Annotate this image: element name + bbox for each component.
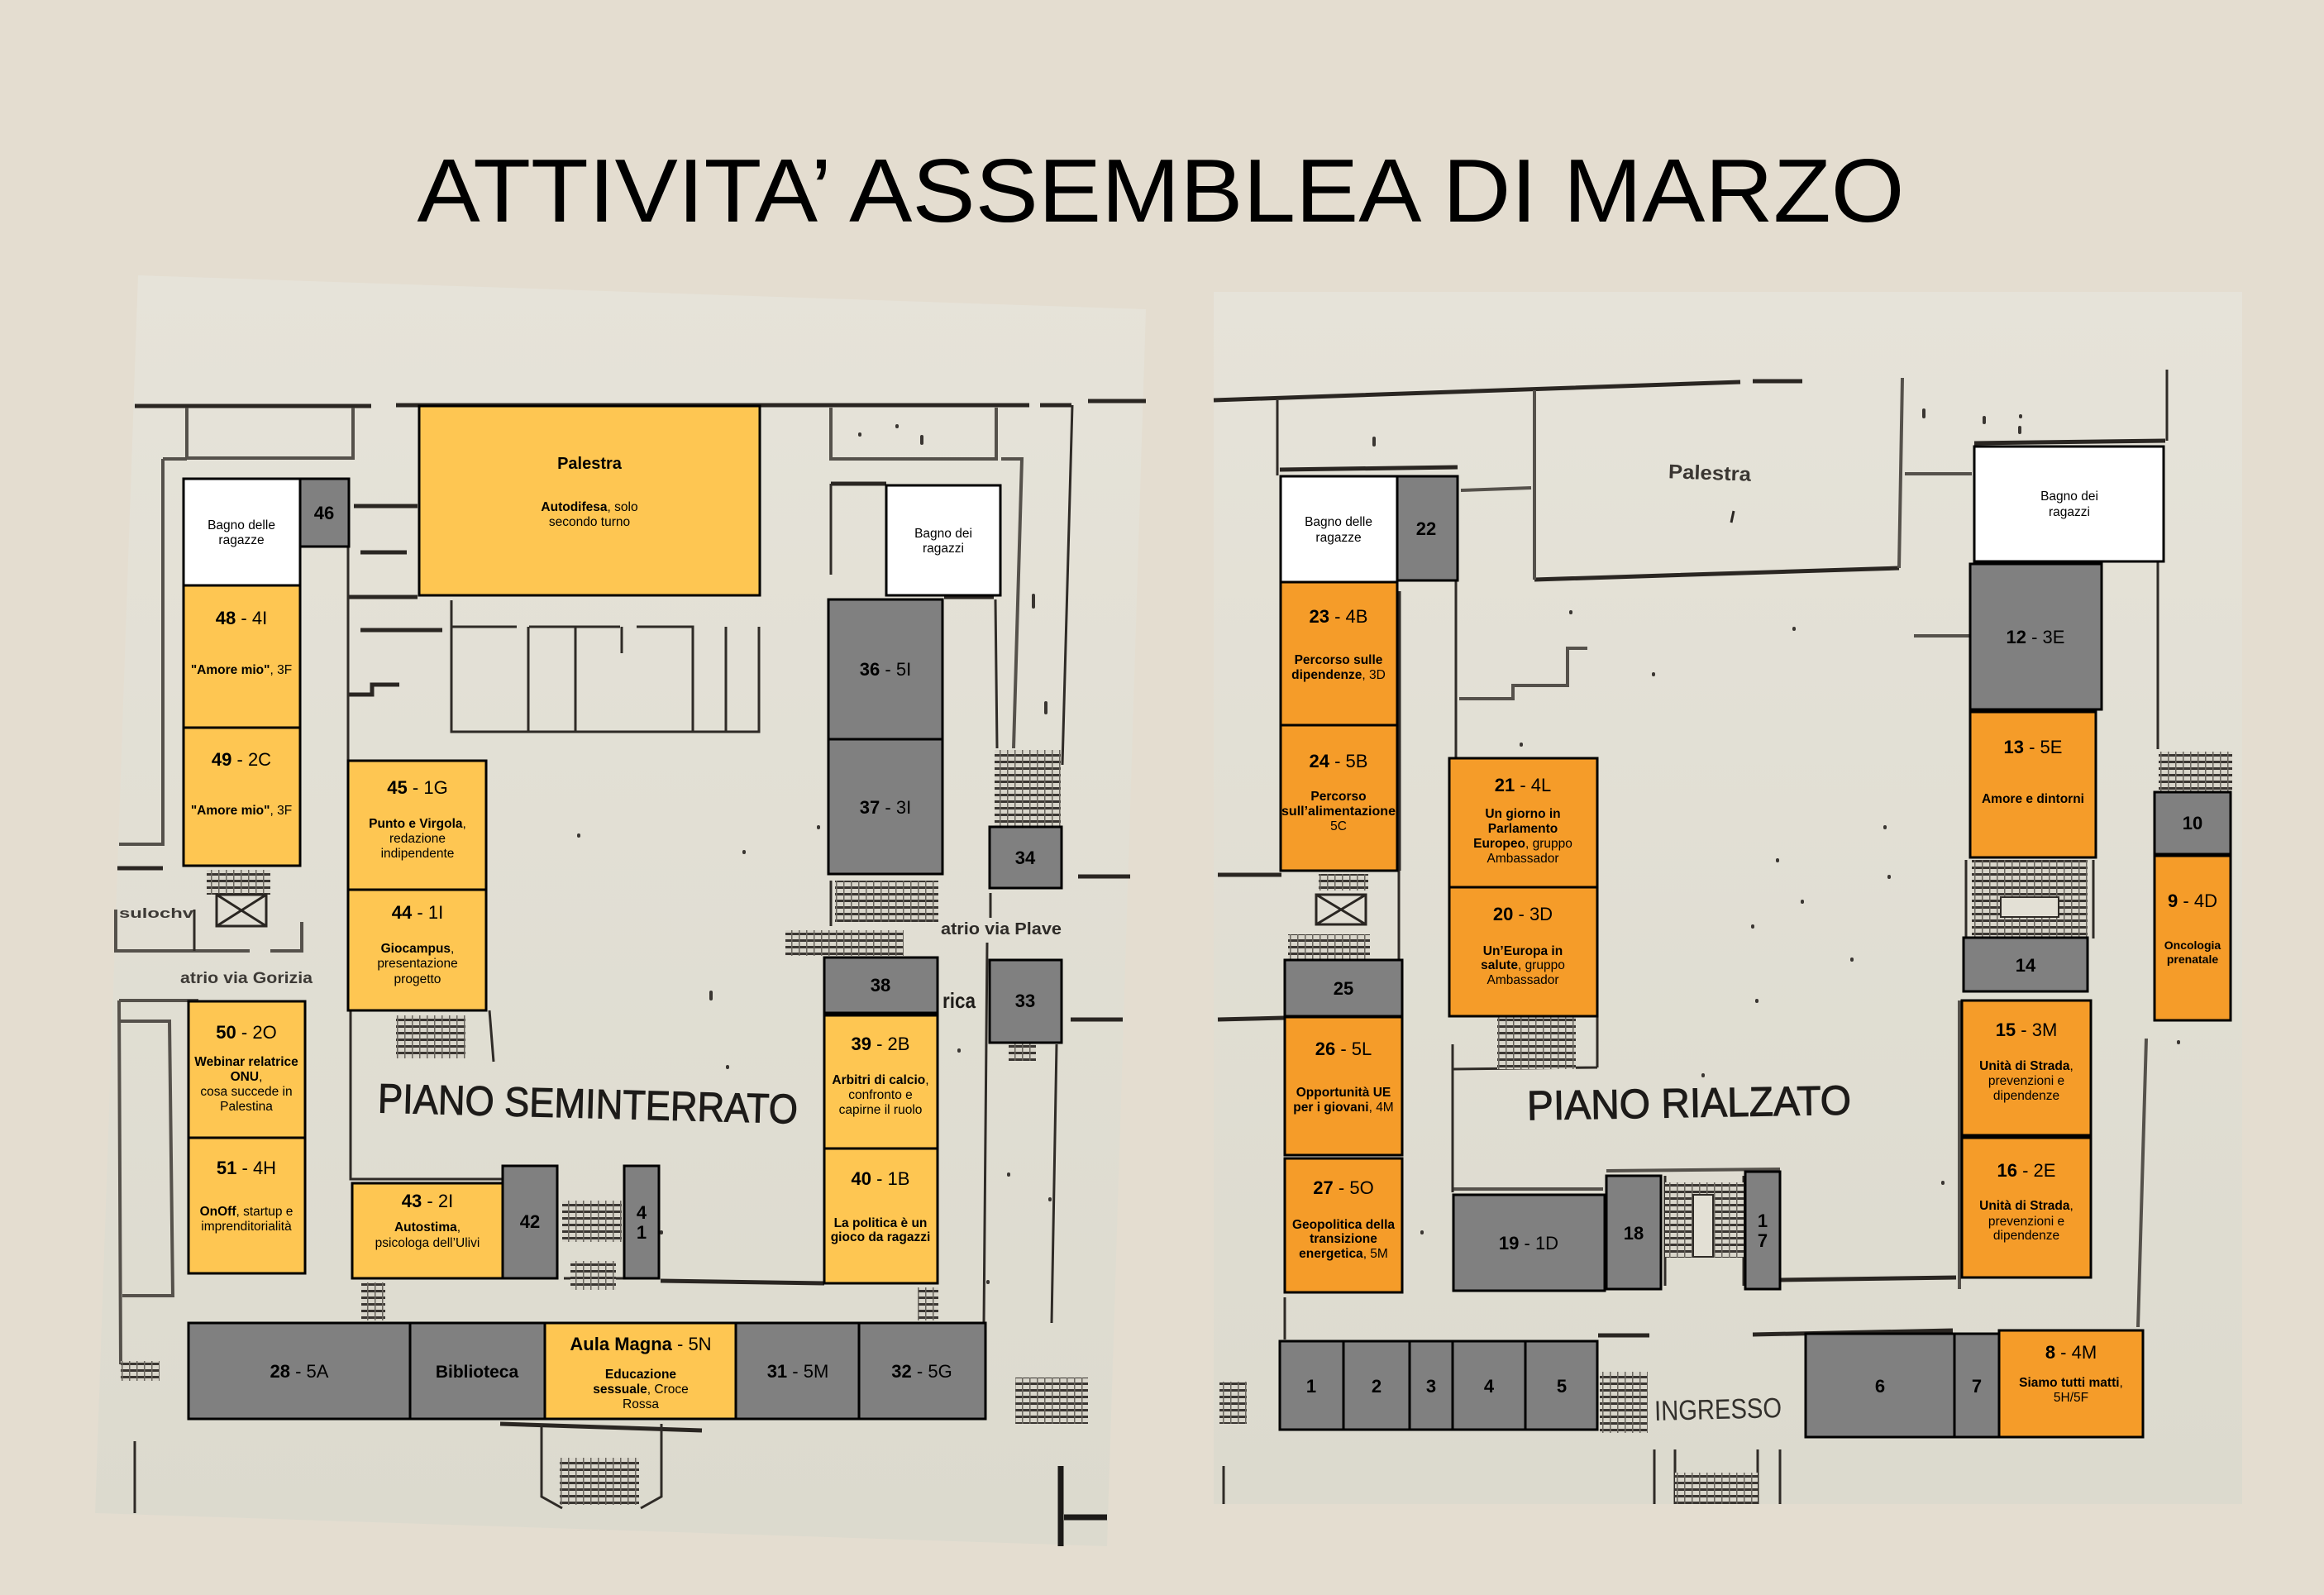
room 23: Percorso sulle — [1295, 653, 1383, 667]
room 45: indipendente — [381, 847, 454, 861]
room 3 — [1410, 1341, 1453, 1430]
room 18: 18 — [1624, 1223, 1644, 1244]
room 14 — [1964, 938, 2088, 991]
room 34: 34 — [1015, 848, 1036, 868]
room 50 — [188, 1001, 305, 1138]
room 10 — [2155, 792, 2231, 854]
panel: piano rialzato — [1214, 292, 2242, 1504]
room: bagno dei ragazzi: ragazzi — [923, 542, 964, 556]
paper floor plan background — [95, 275, 1146, 1546]
room 48: "Amore mio", 3F — [191, 663, 292, 677]
room 31: 31 - 5M — [767, 1361, 828, 1382]
room 24: 5C — [1330, 819, 1347, 833]
room 27: energetica, 5M — [1299, 1247, 1388, 1261]
room 51: 51 - 4H — [217, 1158, 276, 1178]
room 41 — [624, 1166, 659, 1278]
room 33 — [990, 960, 1062, 1043]
room 14: 14 — [2016, 955, 2036, 976]
room 21 — [1449, 758, 1597, 887]
room 41: 1 — [637, 1222, 647, 1243]
room 21: Parlamento — [1488, 822, 1558, 836]
room 13: Amore e dintorni — [1982, 792, 2084, 806]
plan labels: sulochv — [119, 905, 194, 921]
room 46: 46 — [314, 503, 334, 523]
room 20 — [1449, 887, 1597, 1016]
floor label: piano rialzato: PIANO RIALZATO — [1527, 1077, 1851, 1129]
room 7 — [1954, 1334, 1999, 1437]
room 8: Siamo tutti matti, — [2019, 1376, 2123, 1390]
room 50: Webinar relatrice — [194, 1055, 298, 1069]
room: bagno delle ragazze: Bagno delle — [1305, 515, 1372, 529]
room 8: 5H/5F — [2054, 1391, 2088, 1405]
room 10: 10 — [2183, 813, 2202, 833]
room: aula magna: sessuale, Croce — [593, 1382, 689, 1397]
room 22 — [1397, 476, 1458, 580]
room 20: Un’Europa in — [1483, 944, 1563, 958]
room 21: Europeo, gruppo — [1473, 837, 1572, 851]
room 50: Palestina — [220, 1100, 273, 1114]
room 16: 16 - 2E — [1997, 1160, 2055, 1181]
room 48: 48 - 4I — [216, 608, 267, 628]
plan labels: rica — [942, 988, 976, 1013]
room 16: prevenzioni e — [1988, 1215, 2064, 1229]
room 21: 21 - 4L — [1495, 775, 1551, 795]
room 43 — [352, 1183, 503, 1278]
room: bagno delle ragazze — [184, 479, 300, 585]
room 39: Arbitri di calcio, — [832, 1073, 929, 1087]
paper floor plan background — [1214, 292, 2242, 1504]
room 15: 15 - 3M — [1996, 1020, 2057, 1040]
room 51 — [188, 1138, 305, 1273]
room 36: 36 - 5I — [860, 659, 911, 680]
room 39: confronto e — [848, 1088, 913, 1102]
room: bagno delle ragazze — [1281, 476, 1397, 582]
plan labels: atrio via Gorizia — [180, 970, 313, 987]
room 12 — [1970, 564, 2102, 709]
room 17: 1 — [1758, 1211, 1768, 1231]
room 38 — [824, 957, 938, 1013]
room 24: 24 - 5B — [1310, 751, 1367, 771]
room 12: 12 - 3E — [2007, 627, 2064, 647]
room: palestra: Palestra — [557, 455, 623, 473]
room 23: 23 - 4B — [1310, 606, 1367, 627]
room: bagno dei ragazzi: Bagno dei — [914, 527, 972, 541]
room 7: 7 — [1972, 1376, 1982, 1397]
room 45: redazione — [389, 832, 446, 846]
room 1: 1 — [1306, 1376, 1316, 1397]
room 34 — [990, 827, 1062, 888]
room 43: 43 - 2I — [402, 1191, 453, 1211]
room 2: 2 — [1372, 1376, 1382, 1397]
room: aula magna — [545, 1323, 736, 1419]
room 21: Ambassador — [1487, 852, 1559, 866]
room 40: 40 - 1B — [852, 1168, 909, 1189]
room 45 — [348, 761, 486, 890]
room 33: 33 — [1015, 991, 1035, 1011]
panel: piano seminterrato — [95, 275, 1146, 1546]
room 51: OnOff, startup e — [200, 1205, 293, 1219]
room 39: capirne il ruolo — [839, 1103, 922, 1117]
room 49: 49 - 2C — [212, 749, 271, 770]
plan labels: atrio via Plave — [941, 920, 1062, 938]
room 37: 37 - 3I — [860, 797, 911, 818]
room 27: 27 - 5O — [1313, 1177, 1374, 1198]
room 27 — [1285, 1158, 1402, 1292]
room 6: 6 — [1875, 1376, 1885, 1397]
room 16: dipendenze — [1993, 1229, 2059, 1243]
room 27: transizione — [1310, 1232, 1377, 1246]
room 24: Percorso — [1310, 790, 1367, 804]
plan line work — [116, 401, 1146, 1546]
room 23 — [1281, 582, 1397, 725]
room 43: Autostima, — [394, 1220, 461, 1234]
room 25: 25 — [1334, 978, 1353, 999]
room 17: 7 — [1758, 1230, 1768, 1251]
room 49: "Amore mio", 3F — [191, 804, 292, 818]
room 51: imprenditorialità — [201, 1220, 292, 1234]
room 25 — [1285, 960, 1402, 1016]
room 19 — [1453, 1195, 1605, 1291]
room 31 — [736, 1323, 859, 1419]
room 15 — [1962, 1000, 2091, 1135]
room 41: 4 — [637, 1202, 647, 1223]
room 50: ONU, — [231, 1070, 262, 1084]
room 44 — [348, 890, 486, 1010]
room: bagno dei ragazzi — [1974, 447, 2164, 561]
room 20: 20 - 3D — [1493, 904, 1553, 924]
room 18 — [1606, 1176, 1661, 1289]
room 1 — [1280, 1341, 1343, 1430]
room 13 — [1970, 712, 2096, 857]
room 44: 44 - 1I — [392, 902, 443, 923]
room: bagno delle ragazze: Bagno delle — [208, 518, 275, 532]
room 22: 22 — [1416, 518, 1436, 539]
room 36 — [828, 599, 942, 739]
room 37 — [828, 739, 942, 874]
room 13: 13 - 5E — [2004, 737, 2062, 757]
room 20: salute, gruppo — [1481, 958, 1565, 972]
room 26 — [1285, 1017, 1402, 1155]
room 15: dipendenze — [1993, 1089, 2059, 1103]
room 26: Opportunità UE — [1296, 1086, 1391, 1100]
room 50: 50 - 2O — [216, 1022, 277, 1043]
room 4 — [1453, 1341, 1525, 1430]
room 21: Un giorno in — [1485, 807, 1561, 821]
room 17 — [1745, 1172, 1780, 1289]
room 23: dipendenze, 3D — [1291, 668, 1386, 682]
room 5 — [1525, 1341, 1597, 1430]
room 28 — [188, 1323, 410, 1419]
floor label: piano seminterrato: PIANO SEMINTERRATO — [377, 1075, 799, 1133]
room 49 — [184, 728, 300, 866]
room: bagno dei ragazzi: ragazzi — [2049, 505, 2090, 519]
room 42 — [503, 1166, 557, 1278]
room 8: 8 - 4M — [2045, 1342, 2097, 1363]
room 32 — [859, 1323, 985, 1419]
room 9: prenatale — [2167, 953, 2218, 966]
room 26: 26 - 5L — [1315, 1039, 1372, 1059]
room: palestra — [419, 406, 760, 595]
room 38: 38 — [871, 975, 890, 996]
room 44: progetto — [394, 972, 441, 986]
room 24 — [1281, 725, 1397, 871]
room 15: Unità di Strada, — [1979, 1059, 2073, 1073]
room 32: 32 - 5G — [891, 1361, 952, 1382]
room 9: Oncologia — [2164, 938, 2221, 952]
room 9 — [2155, 856, 2231, 1020]
room 28: 28 - 5A — [270, 1361, 329, 1382]
room: bagno delle ragazze: ragazze — [1315, 531, 1362, 545]
room: biblioteca: Biblioteca — [436, 1363, 518, 1382]
room 44: Giocampus, — [381, 942, 454, 956]
room 15: prevenzioni e — [1988, 1074, 2064, 1088]
room 4: 4 — [1484, 1376, 1495, 1397]
room: aula magna: Aula Magna - 5N — [570, 1334, 712, 1354]
room 43: psicologa dell’Ulivi — [375, 1236, 480, 1250]
room: bagno dei ragazzi — [886, 485, 1000, 595]
room: bagno delle ragazze: ragazze — [218, 533, 265, 547]
room 5: 5 — [1557, 1376, 1567, 1397]
room 24: sull’alimentazione — [1281, 805, 1396, 819]
title: ATTIVITA’ ASSEMBLEA DI MARZO — [417, 141, 1905, 241]
room 26: per i giovani, 4M — [1293, 1101, 1394, 1115]
room 40 — [824, 1148, 938, 1283]
room 16 — [1962, 1138, 2091, 1277]
room 40: gioco da ragazzi — [831, 1230, 930, 1244]
room 20: Ambassador — [1487, 973, 1559, 987]
room 19: 19 - 1D — [1499, 1233, 1558, 1254]
label: palestra: Palestra — [1668, 461, 1752, 486]
stairs rialzato — [1219, 752, 2232, 1504]
room 6 — [1806, 1334, 1954, 1437]
stairs seminterrato — [121, 750, 1088, 1505]
room 27: Geopolitica della — [1292, 1218, 1395, 1232]
room 39 — [824, 1015, 938, 1148]
label: ingresso: INGRESSO — [1654, 1392, 1782, 1427]
room 8 — [1999, 1330, 2143, 1437]
room 40: La politica è un — [834, 1216, 927, 1230]
room: biblioteca — [410, 1323, 545, 1419]
room: bagno dei ragazzi: Bagno dei — [2040, 489, 2098, 504]
room 46 — [300, 479, 349, 547]
room: palestra: secondo turno — [549, 515, 630, 529]
plan labels — [119, 905, 1062, 1013]
room 2 — [1343, 1341, 1410, 1430]
room: aula magna: Rossa — [623, 1397, 659, 1411]
room 3: 3 — [1426, 1376, 1436, 1397]
room 44: presentazione — [377, 957, 458, 971]
room 48 — [184, 585, 300, 728]
room 45: Punto e Virgola, — [369, 817, 466, 831]
room 9: 9 - 4D — [2168, 891, 2217, 911]
room: palestra: Autodifesa, solo — [541, 500, 638, 514]
room 16: Unità di Strada, — [1979, 1199, 2073, 1213]
room 39: 39 - 2B — [852, 1034, 909, 1054]
plan line work — [1214, 370, 2178, 1504]
room 50: cosa succede in — [200, 1085, 293, 1099]
room: aula magna: Educazione — [605, 1368, 676, 1382]
room 42: 42 — [520, 1211, 540, 1232]
room 45: 45 - 1G — [387, 777, 448, 798]
